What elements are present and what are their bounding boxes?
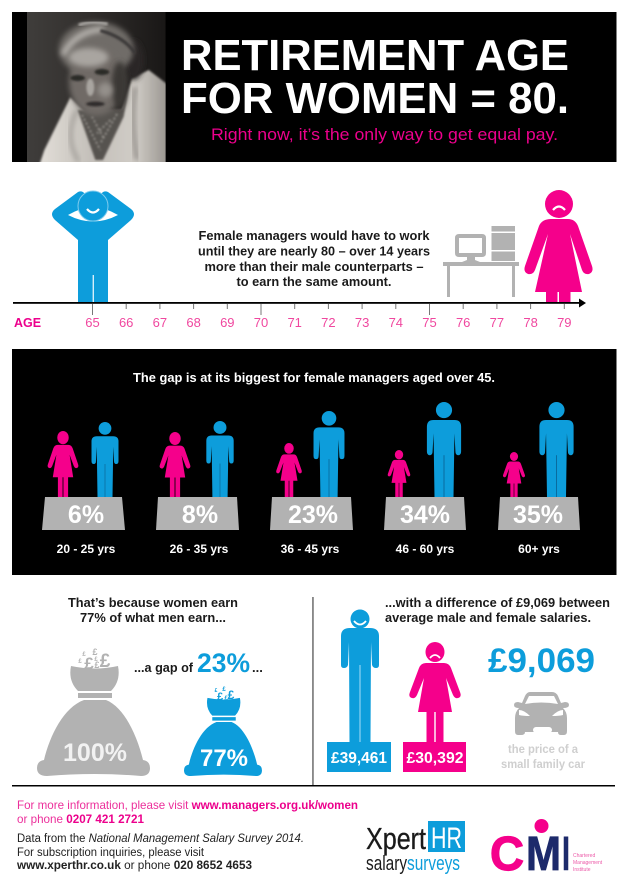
logo: CMI: C — [490, 828, 524, 881]
title: FOR WOMEN = 80. — [181, 75, 569, 123]
group: 60+ yrs: 35% — [513, 501, 563, 529]
group: 26-35 yrs: 8% — [182, 501, 218, 529]
logo: XpertHR salary surveys: salarysurveys — [366, 853, 460, 875]
logo: XpertHR salary surveys — [366, 821, 465, 875]
age labels: 70 — [254, 315, 268, 330]
woman with salary: £30,392 — [406, 750, 464, 767]
icon: grey money bag 100%: 100% — [63, 739, 127, 767]
timeline text: to earn the same amount. — [236, 275, 392, 289]
car caption: the price of a — [508, 742, 578, 756]
group: 36-45 yrs: 36 - 45 yrs — [281, 542, 340, 556]
age labels: 72 — [321, 315, 336, 330]
footer contact text: Data from the National Management Salary Survey 2014. — [17, 833, 304, 845]
group: 26-35 yrs: 26 - 35 yrs — [170, 542, 229, 556]
panel: 77 percent earnings — [37, 595, 263, 776]
timeline text: more than their male counterparts – — [204, 260, 424, 274]
gap label: 23% — [197, 648, 250, 678]
icon: blue money bag 77%: £ — [224, 696, 228, 702]
gap label: ... — [252, 660, 263, 675]
icon: car — [514, 692, 569, 735]
icon: grey money bag 100% — [37, 647, 150, 776]
timeline section — [13, 190, 593, 330]
icon: grey money bag 100%: £ — [92, 647, 98, 657]
age labels: 75 — [422, 315, 437, 330]
age labels — [14, 315, 572, 330]
salary heading: average male and female salaries. — [385, 610, 591, 625]
icon: grey money bag 100%: £ — [100, 651, 111, 672]
icon: grey money bag 100%: £ — [78, 659, 82, 665]
man with salary — [327, 610, 391, 772]
footer contact text: For subscription inquiries, please visit — [17, 847, 205, 859]
icon: unhappy woman at 79 — [524, 190, 593, 303]
logo: CMI: I — [562, 828, 570, 881]
footer contact text: For more information, please visit www.managers.org.uk/women — [17, 798, 358, 812]
age labels: 67 — [153, 315, 167, 330]
group: 60+ yrs: 60+ yrs — [518, 542, 560, 556]
timeline text: Female managers would have to work — [198, 229, 430, 243]
age labels: 77 — [490, 315, 504, 330]
icon: desk and computer — [443, 226, 519, 297]
icon: grey money bag 100%: £ — [94, 657, 98, 663]
panel: gap by age group — [12, 349, 616, 575]
group: 26-35 yrs — [156, 421, 239, 556]
icon: blue money bag 77%: £ — [217, 691, 223, 703]
panel: salary difference — [327, 595, 610, 772]
logo: CMI: Chartered — [573, 853, 595, 859]
car caption: small family car — [501, 757, 585, 771]
age labels: 71 — [287, 315, 302, 330]
header banner — [12, 12, 616, 164]
photo of elderly woman — [27, 12, 167, 164]
age labels: 66 — [119, 315, 133, 330]
group: 46-60 yrs: 46 - 60 yrs — [396, 542, 455, 556]
gap label — [134, 648, 263, 678]
icon: grey money bag 100%: £ — [84, 654, 94, 673]
icon: blue money bag 77%: £ — [222, 687, 226, 693]
icon: blue money bag 77%: £ — [228, 688, 235, 702]
car caption — [501, 742, 585, 771]
logo: XpertHR salary surveys: HR — [431, 822, 462, 855]
group: 20-25 yrs: 20 - 25 yrs — [57, 542, 116, 556]
gap label: ...a gap of — [134, 660, 194, 675]
man with salary: £39,461 — [331, 750, 387, 767]
icon: blue money bag 77% — [184, 687, 262, 776]
footer contact text: www.xperthr.co.uk or phone 020 8652 4653 — [16, 860, 252, 872]
timeline text: until they are nearly 80 – over 14 years — [198, 244, 430, 258]
icon: relaxed man at 65 — [52, 191, 134, 303]
group: 46-60 yrs: 34% — [400, 501, 450, 529]
timeline text — [198, 229, 430, 289]
group: 36-45 yrs — [270, 411, 353, 556]
group: 46-60 yrs — [384, 402, 466, 556]
age labels: 78 — [523, 315, 538, 330]
age labels: 74 — [389, 315, 403, 330]
group: 20-25 yrs: 6% — [68, 501, 104, 529]
woman with salary — [403, 642, 466, 772]
footer contact text: or phone 0207 421 2721 — [17, 812, 144, 826]
age labels: 68 — [186, 315, 201, 330]
title — [181, 32, 569, 123]
salary heading: ...with a difference of £9,069 between — [385, 595, 610, 610]
earnings heading: That’s because women earn — [68, 595, 238, 610]
icon: blue money bag 77%: 77% — [200, 745, 248, 772]
age labels: 65 — [85, 315, 100, 330]
group: 60+ yrs — [498, 402, 580, 556]
footer contact text — [16, 798, 358, 872]
group: 20-25 yrs — [42, 422, 125, 556]
logo: CMI: M — [526, 828, 561, 881]
subtitle: Right now, it’s the only way to get equal pay. — [211, 125, 558, 144]
age labels: AGE — [14, 315, 41, 330]
logo: CMI: Management — [573, 860, 603, 866]
group: 36-45 yrs: 23% — [288, 501, 338, 529]
icon: grey money bag 100%: £ — [94, 660, 100, 670]
salary heading — [385, 595, 610, 625]
logo: CMI — [490, 819, 603, 881]
earnings heading — [68, 595, 238, 625]
panel heading: The gap is at its biggest for female managers aged over 45. — [133, 371, 495, 385]
logo: XpertHR salary surveys: Xpert — [366, 821, 426, 856]
difference figure: £9,069 — [488, 642, 595, 680]
age axis with arrow — [13, 298, 586, 315]
age labels: 69 — [220, 315, 235, 330]
age labels: 73 — [355, 315, 369, 330]
icon: grey money bag 100%: £ — [82, 652, 86, 658]
age labels: 76 — [456, 315, 470, 330]
earnings heading: 77% of what men earn... — [80, 610, 226, 625]
title: RETIREMENT AGE — [181, 32, 569, 80]
age labels: 79 — [557, 315, 572, 330]
logo: CMI: Institute — [573, 867, 591, 873]
icon: blue money bag 77%: £ — [215, 688, 218, 694]
